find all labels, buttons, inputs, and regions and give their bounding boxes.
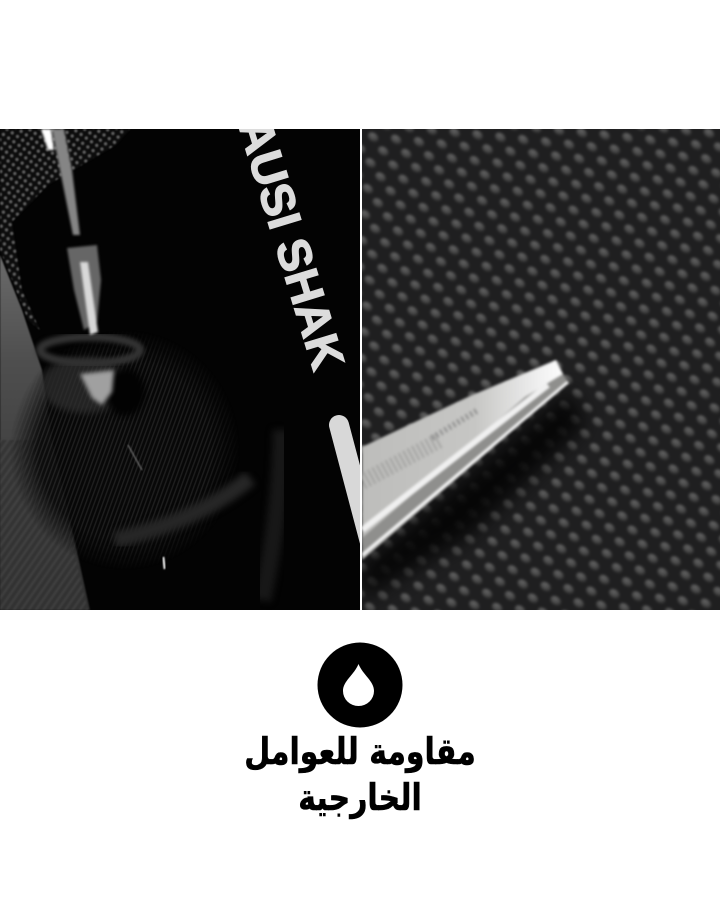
photo pair: water and scissors tests: [0, 129, 720, 728]
heading line 1: مقاومة للعوامل: [244, 731, 476, 773]
dark eyelet and knit patch: [10, 330, 282, 600]
blade shadow: [362, 390, 585, 600]
printed stripe: [339, 425, 372, 550]
mesh fabric at top-left: [0, 129, 130, 330]
water stream: [41, 129, 101, 335]
heading line 2: الخارجية: [298, 777, 422, 819]
icon: water drop in black circle: [318, 642, 402, 728]
printed logo text: AUSI SHAK: [228, 111, 355, 376]
right photo: scissors on fabric: [352, 119, 720, 620]
scissors blade: [362, 360, 568, 560]
left photo: water on shoe: [0, 111, 372, 610]
grey wedge of the shoe side: [0, 255, 90, 610]
